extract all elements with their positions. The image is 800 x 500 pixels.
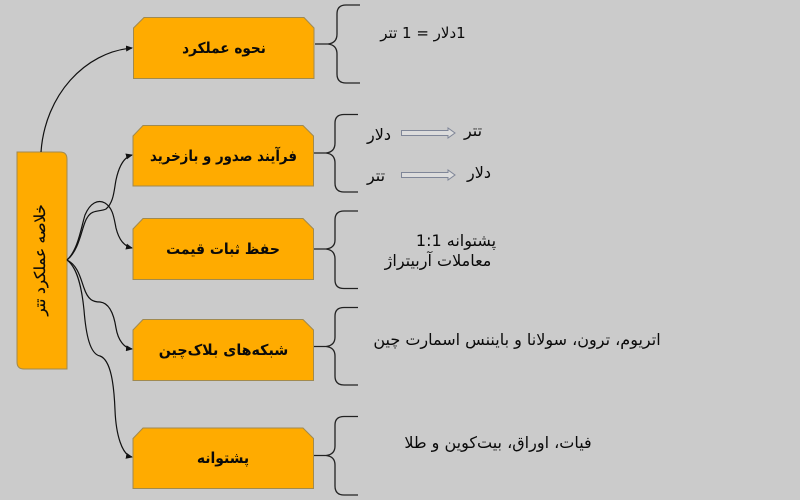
arrow: dollar to tether (402, 128, 455, 138)
brace: blockchains (314, 308, 358, 385)
connector: root to backing (67, 260, 132, 457)
box: blockchain networks (133, 320, 314, 380)
box: issuance and redemption (133, 126, 314, 186)
box: backing: پشتوانه (197, 451, 249, 467)
brace: price stability (314, 211, 358, 288)
text: 1 dollar equals 1 tether: 1دلار = 1 تتر (379, 24, 466, 42)
text: arbitrage trades: معاملات آربیتراژ (384, 251, 491, 271)
box: price stability: حفظ ثبات قیمت (166, 242, 280, 258)
text: 1:1 backing: پشتوانه 1:1 (416, 231, 496, 251)
text: tether result: تتر (463, 121, 482, 141)
connector: root to how it works (41, 48, 132, 152)
arrow: tether to dollar (402, 170, 455, 180)
brace: how it works (315, 5, 360, 83)
brace: issuance (314, 114, 358, 192)
connector: root to issuance process (67, 155, 132, 260)
text: tether: تتر (366, 166, 385, 186)
box: price stability (133, 218, 314, 280)
box: backing (133, 428, 314, 488)
box: how it works: نحوه عملکرد (182, 40, 266, 57)
text: reserve assets: فیات، اوراق، بیت‌کوین و طلا (404, 433, 592, 453)
root box: Tether summary: خلاصه عملکرد تتر (31, 204, 49, 317)
connector: root to price stability (67, 202, 132, 260)
text: dollar: دلار (366, 125, 391, 145)
root box: Tether summary (17, 152, 67, 369)
text: supported blockchains: اتریوم، ترون، سولانا و بایننس اسمارت چین (373, 330, 661, 350)
text: dollar result: دلار (466, 163, 491, 183)
brace: backing (314, 416, 358, 495)
box: issuance and redemption: فرآیند صدور و بازخرید (150, 146, 297, 165)
connector: root to blockchains (67, 260, 132, 349)
box: blockchain networks: شبکه‌های بلاک‌چین (159, 342, 288, 359)
box: how it works (134, 18, 314, 78)
